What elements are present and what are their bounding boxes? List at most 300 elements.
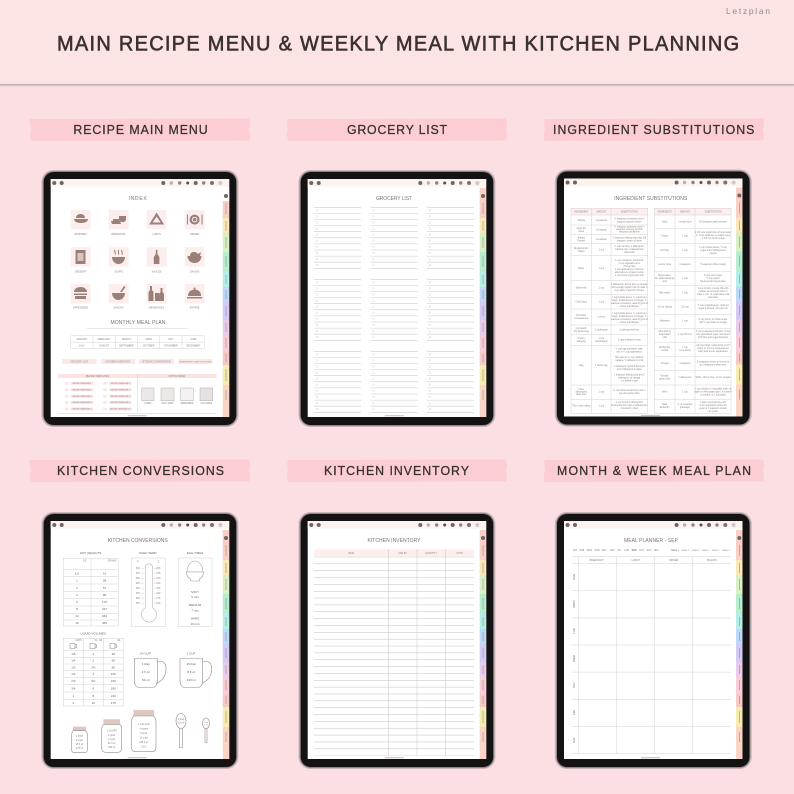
- quarter cup mug: [134, 652, 166, 688]
- weekly meal grid: TUE: [572, 628, 576, 634]
- icon: snacks: [109, 284, 128, 310]
- right substitutions table: 1 teaspoon: [679, 263, 691, 266]
- right substitutions table: 1 cup chicken or vegetable broth, or: [695, 388, 731, 390]
- pint jar: 16 fl oz: [76, 743, 84, 746]
- panel: kitchen conversions tablet: [42, 512, 238, 769]
- right substitutions table: and: [663, 281, 667, 283]
- liquid volumes table: 60: [112, 658, 115, 662]
- icon: lunch: [147, 210, 166, 236]
- right substitutions table: 1 tablespoon: [678, 376, 692, 379]
- tablespoon measuring spoon: 15 ml: [178, 722, 184, 724]
- left substitutions table: cloves and allspice: [620, 322, 640, 324]
- weekly meal grid: BREAKFAST: [590, 559, 604, 562]
- liquid volumes table: 16: [92, 701, 95, 705]
- weekly meal grid: SNACKS: [707, 559, 717, 562]
- right substitutions table: apple cider: [659, 378, 671, 380]
- icon: appetizers: APPETIZERS: [73, 306, 88, 310]
- notes paper section: MEMORIES: [180, 402, 194, 405]
- dry weights table: 2: [76, 586, 78, 590]
- left substitutions table: ¼ teaspoon baking soda plus 5/8: [612, 236, 647, 240]
- icon: breakfast: BREAKFAST: [112, 233, 126, 236]
- inventory table: COST: [456, 552, 464, 555]
- gallon jar: 4 quarts: [139, 728, 149, 730]
- quart jar: 1 QUART: [107, 730, 117, 732]
- left substitutions table: ½ teaspoon cinnamon plus ¼: [614, 224, 644, 228]
- left substitutions table: unsweetened: [574, 317, 589, 320]
- icon: salads: SALADS: [190, 270, 200, 274]
- month and week navigation: [573, 549, 731, 552]
- oven temperature thermometer: 160: [156, 602, 161, 605]
- heading: kitchen inventory: KITCHEN INVENTORY: [324, 464, 470, 478]
- right substitutions table: make 1 cup, or evaporated milk: [697, 293, 730, 296]
- month and week navigation: APR: [595, 549, 600, 552]
- right substitutions table: butter or 1/2 cup unsweetened: [697, 347, 729, 350]
- left substitutions table: 1 cup minus 2 tablespoons: [616, 401, 644, 404]
- liquid volumes table: LIQUID VOLUMES: [81, 632, 106, 636]
- left substitutions table: 1 teaspoon baking soda and 1: [614, 374, 645, 376]
- left substitutions table: 1 cup tomato sauce, ¼ cup brown: [612, 312, 647, 315]
- right substitutions table: 1/8 teaspoon garlic powder: [699, 220, 727, 224]
- left substitutions table: Chocolate,: [576, 314, 587, 317]
- liquid volumes table: 5⅓: [91, 679, 96, 683]
- right substitutions table: White, cherry wine, or rice vinegar: [696, 376, 731, 379]
- liquid volumes table: 4: [92, 672, 94, 676]
- left substitutions table: 1 ounce: [597, 316, 606, 318]
- heading: kitchen inventory: [287, 460, 507, 482]
- right substitutions table: SUBSTITUTION: [705, 212, 722, 214]
- right substitutions table: baby food prune, applesauce: [698, 350, 729, 353]
- left substitutions table: Panko: [578, 251, 585, 253]
- left substitutions table: May also try ¼ cup mashed: [615, 356, 644, 359]
- egg times panel: 10 min: [190, 622, 200, 626]
- right substitutions table: Ginger: [661, 234, 668, 238]
- month and week navigation: DEC: [654, 549, 659, 552]
- right substitutions table: 1 small clove: [678, 222, 692, 224]
- panel: grocery list tablet: [298, 170, 495, 427]
- weekly meal grid: [572, 557, 731, 753]
- title: MAIN RECIPE MENU & WEEKLY MEAL WITH KITCHEN PLANNING: [57, 32, 739, 56]
- dry weights table: 57: [103, 586, 106, 590]
- right substitutions table: 1/2 cup butter, reduced fat or 1/4: [696, 344, 730, 347]
- icon: dessert: DESSERT: [75, 270, 87, 274]
- left substitutions table: Butter: [578, 267, 585, 270]
- left substitutions table: white flour: [576, 393, 587, 396]
- liquid volumes table: 1/8: [71, 652, 76, 656]
- right substitutions table: 1 cup of skim, low-fat milk with: [697, 287, 729, 290]
- weekly meal grid: DINNER: [669, 559, 679, 562]
- recipe templates section: RECIPE TEMPLATES: [86, 375, 110, 378]
- panel: ingredient substitutions tablet: [555, 170, 752, 426]
- left substitutions table: Cornstarch: [576, 327, 588, 330]
- right substitutions table: ½ cup sour cream: [704, 273, 722, 277]
- left substitutions table: ½ teaspoon cinnamon plus ½: [614, 216, 644, 220]
- left substitutions table: plus enough regular milk to make 1: [611, 286, 648, 289]
- icon: sauces: [147, 247, 166, 274]
- left substitutions table: banana, ½ tablespoon milk: [616, 358, 644, 362]
- right substitutions table: or 1 cup molasses or maple syrup: [696, 234, 731, 237]
- liquid volumes table: 240: [111, 694, 116, 698]
- oven temperature thermometer: 375: [136, 592, 140, 595]
- right substitutions table: is needed, or 1 cup water: [700, 394, 726, 396]
- right substitutions table: and ½ cup water or vinegar: [699, 320, 727, 324]
- right substitutions table: Vinegar,: [661, 374, 669, 378]
- month grid: MARCH: [122, 338, 131, 341]
- oven temperature thermometer: 450: [136, 577, 140, 580]
- right substitutions table: sugar and 2 tablespoons: [700, 249, 726, 252]
- oven temperature thermometer: 475: [136, 572, 140, 575]
- inventory table: QUANTITY: [425, 552, 437, 555]
- recipe templates section: RECIPE TEMPLATE 3: [73, 395, 91, 398]
- left substitutions table: whipping: [577, 341, 587, 343]
- notes paper section: LINED: [144, 402, 152, 405]
- dry weights table: 85: [103, 593, 106, 597]
- dry weights table: 6: [76, 600, 78, 604]
- left substitutions table: in a baked recipe: [621, 380, 639, 382]
- icon: sauces: SAUCES: [152, 270, 162, 274]
- oven temperature thermometer: 190: [156, 592, 161, 595]
- heading: ingredient substitutions: [544, 118, 764, 141]
- right substitutions table: Ketchup: [660, 249, 670, 252]
- left substitutions table: 1 tablespoon lemon juice or vinegar: [611, 283, 648, 286]
- month grid: JUNE: [190, 338, 197, 341]
- left substitutions table: Chili Sauce: [575, 302, 588, 304]
- oven temperature thermometer: 230: [156, 577, 161, 580]
- month and week navigation: WEEK 3: [692, 550, 700, 552]
- right substitutions table: less granulated sugar, simmered: [696, 333, 730, 336]
- oven temperature thermometer: 175: [156, 597, 161, 600]
- liquid volumes table: 2: [72, 701, 74, 705]
- right substitutions table: [654, 208, 732, 413]
- right substitutions table: Wine: [662, 392, 668, 394]
- dry weights table: 8: [76, 607, 78, 611]
- recipe templates section: [58, 374, 137, 411]
- month and week navigation: OCT: [639, 549, 645, 552]
- left substitutions table: tablespoon of vinegar: [618, 376, 641, 380]
- left substitutions table: 1 cup: [598, 288, 605, 290]
- month grid: DECEMBER: [186, 344, 200, 348]
- left substitutions table: Flour,: [578, 388, 585, 391]
- dry weights table: DRY WEIGHTS: [80, 551, 101, 555]
- left substitutions table: 1 cup: [598, 250, 605, 252]
- weekly meal grid: SUN: [572, 574, 576, 580]
- left substitutions table: 1 cup: [598, 406, 605, 408]
- pint jar: 475 ml: [76, 747, 84, 750]
- right substitutions table: until thick and sugar dissolves: [698, 336, 729, 339]
- brand name: Letzplan: [726, 6, 770, 16]
- right substitutions table: 1 cup: [682, 278, 689, 280]
- icon: starters: [71, 210, 90, 236]
- month and week navigation: WEEK 1: [671, 550, 680, 552]
- egg times panel: [178, 551, 212, 627]
- right substitutions table: ½ teaspoon white vinegar: [700, 262, 726, 266]
- egg times panel: MEDIUM: [189, 603, 202, 607]
- right substitutions table: evaporated: [659, 333, 671, 336]
- month and week navigation: SEP: [632, 549, 637, 552]
- left substitutions table: 1 teaspoon: [596, 228, 608, 232]
- weekly meal grid: SAT: [572, 737, 576, 743]
- left substitutions table: alternative in a baked recipe: [615, 271, 644, 274]
- left substitutions table: cup all-purpose flour: [619, 392, 640, 395]
- pint jar: 2 cups: [76, 739, 84, 742]
- weekly meal grid: FRI: [572, 710, 576, 715]
- month grid: AUGUST: [99, 344, 110, 348]
- recipe templates section: RECIPE TEMPLATE 10: [110, 408, 130, 411]
- dry weights table: 1/2: [75, 572, 79, 576]
- icon: snacks: SNACKS: [114, 306, 124, 310]
- month and week navigation: WEEK 6: [722, 550, 731, 552]
- panel: meal planner tablet: [555, 512, 752, 769]
- dry weights table: 16: [75, 621, 79, 625]
- right substitutions table: milk: [663, 337, 668, 339]
- left substitutions table: teaspoon nutmeg and 1/8: [616, 228, 643, 231]
- month grid: FEBRUARY: [98, 338, 111, 341]
- panel: recipe main menu tablet: [42, 170, 238, 427]
- right substitutions table: or 2¼ teaspoons active dry: [699, 404, 728, 407]
- left substitutions table: teaspoon ground cloves: [617, 220, 642, 223]
- left substitutions table: (for thickening): [574, 330, 589, 333]
- left substitutions table: Buttermilk: [576, 286, 587, 290]
- left substitutions table: Powder: [577, 239, 585, 242]
- right substitutions table: (unmelted): [680, 349, 691, 352]
- left substitutions table: ¾ cup whole-wheat flour plus ¼: [613, 389, 646, 392]
- quarter cup mug: 60 ml: [142, 678, 150, 682]
- left substitutions table: (unwhipped): [595, 341, 608, 343]
- right substitutions table: 1 cup evaporated milk plus ½ cup: [696, 329, 731, 333]
- month and week navigation: AUG: [624, 549, 629, 552]
- oven temperature thermometer: °C: [157, 560, 160, 564]
- left substitutions table: 1 cup tomato sauce, ¼ cup brown: [612, 296, 647, 299]
- index title: INDEX: [129, 196, 147, 202]
- one cup mug: 8 fl oz: [187, 670, 196, 674]
- egg times panel: 7 min: [191, 608, 199, 612]
- right substitutions table: powder and enough water to: [698, 290, 728, 293]
- left substitutions table: 1 cup: [598, 302, 605, 304]
- gallon jar: [132, 710, 156, 752]
- month grid: SEPTEMBER: [119, 344, 134, 348]
- right substitutions table: 1 cup: [682, 250, 689, 252]
- quick link pills: [62, 359, 213, 364]
- quart jar: 32 fl oz: [108, 742, 116, 745]
- right substitutions table: or 2 teaspoons white wine: [700, 364, 727, 366]
- weekly meal grid: MON: [572, 600, 576, 608]
- right substitutions table: Reduced fat mayonnaise: [700, 280, 726, 283]
- recipe templates section: RECIPE TEMPLATE 5: [73, 408, 91, 411]
- month and week navigation: FEB: [580, 549, 585, 552]
- right substitutions table: sugar if desired, 1/2 cup fruit: [699, 307, 728, 310]
- heading: recipe main menu: RECIPE MAIN MENU: [73, 123, 208, 137]
- right substitutions table: 1 1/4 cups sugar plus 1/4 cup water: [695, 231, 731, 234]
- right substitutions table: fat, salad-dressing,: [655, 277, 675, 280]
- right substitutions table: (package): [680, 407, 690, 409]
- dry weights table: 455: [102, 621, 107, 625]
- heading: month and week meal plan: [544, 460, 764, 482]
- left substitutions table: 1 cup: [598, 392, 605, 394]
- right substitutions table: or 3/4 cup brown sugar: [701, 237, 725, 240]
- liquid volumes table: 2⅔: [91, 666, 96, 670]
- right substitutions table: Molasses: [660, 320, 670, 322]
- one cup mug: [180, 652, 212, 688]
- liquid volumes table: FL. OZ: [95, 639, 103, 642]
- inventory title: KITCHEN INVENTORY: [368, 538, 421, 544]
- month grid: [71, 336, 204, 349]
- dry weights table: 227: [102, 607, 107, 611]
- left substitutions table: 1 cup: [598, 338, 605, 340]
- icon: soups: SOUPS: [114, 270, 123, 274]
- icon: soups: [109, 247, 128, 274]
- right substitutions table: 1/2 cup: [681, 306, 689, 308]
- oven temperature thermometer: 425: [136, 582, 140, 585]
- left substitutions table: 1 cup: [598, 268, 605, 270]
- icon: appetizers: [71, 284, 90, 310]
- dry weights table: 28: [103, 578, 106, 582]
- left substitutions table: all-purpose flour plus 2 tablespoons: [611, 404, 648, 407]
- left substitutions table: teaspoon cardamom: [619, 231, 640, 234]
- right substitutions table: Vinegar: [661, 362, 669, 365]
- oven temperature thermometer: OVEN TEMP: [139, 551, 157, 555]
- icon: dinner: [185, 210, 204, 236]
- right substitutions table: 1 cup: [682, 236, 689, 238]
- right substitutions table: Yeast,: [662, 403, 668, 406]
- one cup mug: 240 ml: [187, 678, 196, 682]
- left substitutions table: Apple Pie: [576, 227, 587, 230]
- right substitutions table: Mayonnaise,: [658, 275, 672, 277]
- left substitutions table: tofu or ¼ cup applesauce: [616, 350, 643, 354]
- recipe templates section: RECIPE TEMPLATE 1: [73, 382, 91, 385]
- one cup mug: 16 tbsp: [186, 662, 197, 666]
- month and week navigation: WEEK 2: [682, 550, 690, 552]
- heading: kitchen conversions: KITCHEN CONVERSIONS: [57, 464, 224, 478]
- oven temperature thermometer: 500: [136, 567, 140, 570]
- left substitutions table: cloves and allspice: [620, 306, 640, 308]
- icon: beverages: [147, 284, 166, 310]
- liquid volumes table: 8: [92, 694, 94, 698]
- quick link pills: GROCERY LIST: [70, 360, 89, 363]
- left substitutions table: sugar, 2 tablespoons of vinegar, ¼: [612, 315, 647, 318]
- dry weights table: 3: [76, 593, 78, 597]
- left substitutions table: 1 tablespoon ground flaxseed: [614, 365, 645, 368]
- left substitutions table: Flour, cake sifting: [572, 404, 591, 408]
- icon: lunch: LUNCH: [152, 233, 161, 236]
- teaspoon measuring spoon: 5 ml: [204, 724, 208, 726]
- dry weights table: 340: [102, 614, 107, 618]
- notes paper section: DOT GRID: [162, 402, 174, 405]
- one cup mug: 1 CUP: [187, 652, 195, 656]
- left substitutions table: Egg: [579, 365, 584, 367]
- icon: breakfast: [109, 210, 128, 236]
- oven temperature thermometer: 220: [156, 582, 161, 585]
- month grid: OCTOBER: [143, 344, 155, 348]
- weekly meal grid: THU: [572, 682, 576, 689]
- left substitutions table: 2 tablespoons flour: [620, 328, 639, 332]
- gallon jar: 16 cups: [140, 736, 149, 740]
- right substitutions table: 1 cake compressed yeast: [700, 401, 726, 404]
- substitutions title: INGREDIENT SUBSTITUTIONS: [614, 196, 688, 202]
- left substitutions table: 1 cup applesauce or fat-free: [615, 268, 644, 271]
- inventory table: USE BY: [398, 552, 407, 555]
- left substitutions table: INGREDIENT: [574, 212, 589, 214]
- right substitutions table: 2 teaspoons lemon or lime juice: [697, 360, 730, 364]
- icon: dinner: DINNER: [190, 233, 199, 236]
- oven temperature thermometer: 350: [136, 597, 140, 600]
- left substitutions table: 7/8 cup lard: [623, 265, 636, 268]
- right substitutions table: Oil, for baking: [658, 306, 673, 308]
- liquid volumes table: 180: [111, 686, 116, 690]
- liquid volumes table: 160: [111, 679, 116, 683]
- oven temperature thermometer: 260: [156, 567, 161, 570]
- left substitutions table: SUBSTITUTION: [621, 212, 638, 214]
- dry weights table: 1: [76, 578, 78, 582]
- right substitutions table: AMOUNT: [680, 210, 691, 214]
- liquid volumes table: 1/3: [71, 666, 76, 670]
- gallon jar: 1 GALLON: [138, 723, 150, 726]
- meal planner title: MEAL PLANNER - SEP: [624, 538, 679, 544]
- gallon jar: 3.8 L: [141, 746, 147, 748]
- grocery list title: GROCERY LIST: [376, 196, 412, 202]
- right substitutions table: active/dry: [660, 406, 670, 409]
- right substitutions table: Shredded or: [658, 330, 671, 333]
- egg times panel: 5 min: [191, 595, 199, 599]
- liquid volumes table: 30: [112, 652, 115, 656]
- month and week navigation: NOV: [646, 549, 652, 552]
- egg times panel: SOFT: [191, 590, 199, 594]
- right substitutions table: 1 teaspoon: [679, 362, 691, 365]
- month and week navigation: WEEK 4: [702, 550, 710, 552]
- liquid volumes table: 3/4: [71, 686, 76, 690]
- left substitutions table: sugar, 2 tablespoons of vinegar, ¼: [612, 299, 647, 302]
- month and week navigation: MAR: [587, 549, 592, 552]
- icon: starters: STARTERS: [74, 233, 87, 236]
- liquid volumes table: 1/2: [71, 672, 76, 676]
- heading: ingredient substitutions: INGREDIENT SUBSTITUTIONS: [553, 123, 754, 137]
- egg times panel: EGG TIMES: [187, 551, 203, 555]
- recipe templates section: RECIPE TEMPLATE 8: [111, 395, 130, 398]
- right substitutions table: Garlic: [662, 220, 669, 224]
- heading: month and week meal plan: MONTH & WEEK MEAL PLAN: [557, 464, 751, 478]
- panel: kitchen inventory tablet: [298, 512, 495, 769]
- left substitutions table: [571, 208, 648, 413]
- dry weights table: GRAMS: [108, 560, 117, 562]
- dry weights table: 170: [102, 600, 107, 604]
- month grid: APRIL: [145, 338, 153, 341]
- egg times panel: HARD: [191, 616, 200, 620]
- right substitutions table: yeast or 1 teaspoon instant: [699, 407, 727, 410]
- pint jar: 1 PINT: [76, 735, 84, 738]
- liquid volumes table: [63, 632, 123, 706]
- left substitutions table: 1 cup vegetable oil or: [618, 262, 640, 265]
- left substitutions table: teaspoon cinnamon, dash of ground: [611, 318, 648, 321]
- quart jar: 946 ml: [108, 746, 116, 749]
- teaspoon measuring spoon: 1 tsp: [204, 721, 208, 724]
- left substitutions table: Breadcrumbs,: [574, 247, 589, 250]
- left substitutions table: 1 teaspoon: [596, 219, 608, 222]
- liquid volumes table: ML: [117, 639, 121, 642]
- quarter cup mug: 2 fl oz: [142, 670, 150, 674]
- quick link pills: KITCHEN INVENTORY: [105, 360, 131, 363]
- right substitutions table: 1 cup: [682, 347, 689, 349]
- icon: salads: [185, 247, 204, 274]
- oven temperature thermometer: [131, 551, 165, 627]
- liquid volumes table: 120: [111, 672, 116, 676]
- right substitutions table: Milk, whole: [659, 292, 671, 294]
- quick link pills: INGREDIENT SUBSTITUTIONS: [180, 361, 212, 363]
- month and week navigation: JAN: [573, 549, 578, 552]
- right substitutions table: ¼-oz envelope: [677, 403, 693, 406]
- icon: dessert: [71, 247, 90, 274]
- left substitutions table: and 3 tablespoons water: [617, 368, 642, 371]
- right substitutions table: INGREDIENT: [658, 212, 672, 214]
- left substitutions table: 2 cups whipped cream: [618, 338, 641, 342]
- icon: beverages: BEVERAGES: [149, 306, 164, 310]
